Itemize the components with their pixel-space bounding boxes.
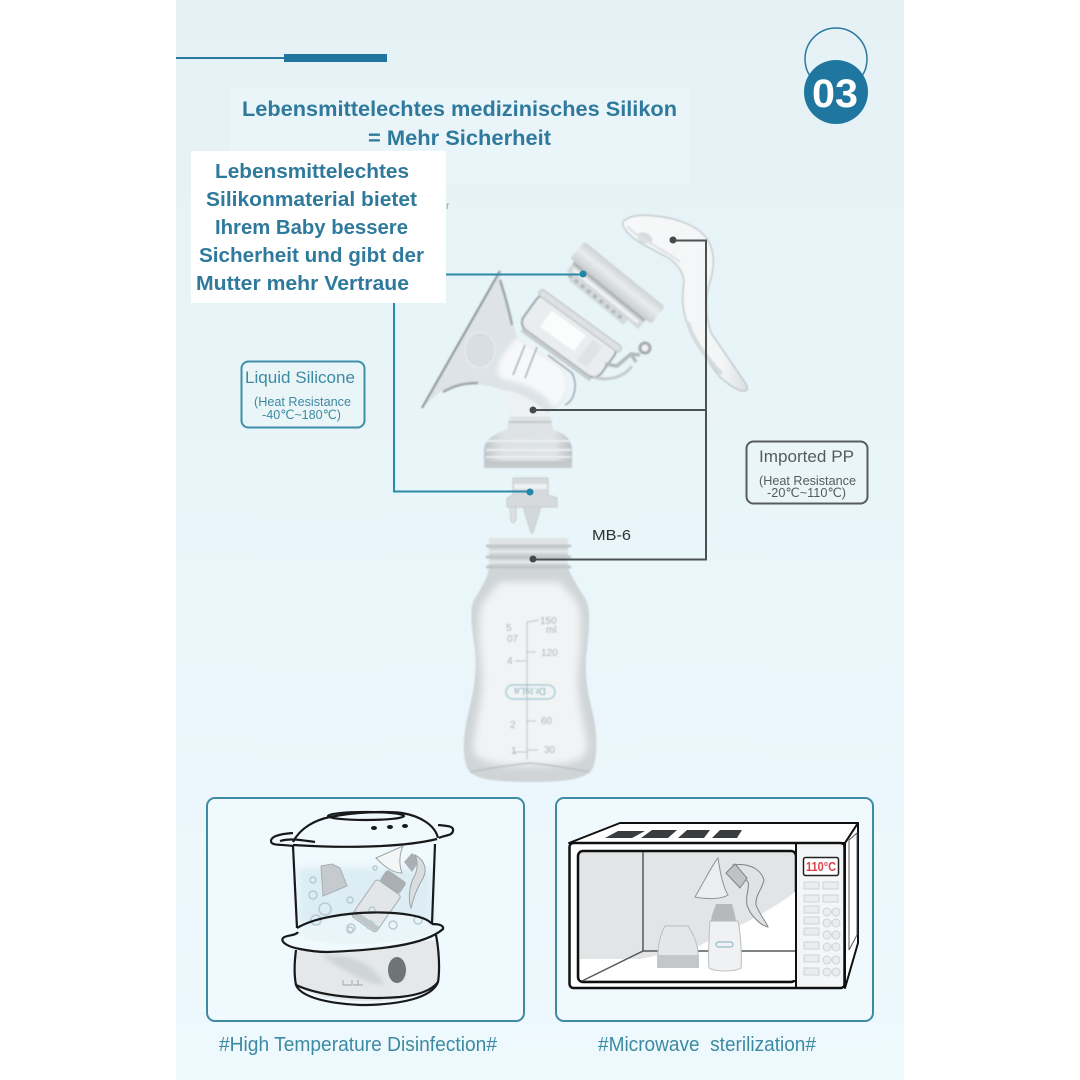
background panel [176, 0, 904, 1080]
section number badge: 03 [812, 72, 858, 116]
bottle: 120 [541, 648, 558, 659]
panel: high temperature disinfection [207, 798, 524, 1021]
label: liquid silicone [242, 362, 364, 428]
title: Lebensmittelechtes medizinisches Silikon [242, 98, 677, 121]
header rule [176, 54, 387, 62]
callout: description text box: Sicherheit und gibt der [199, 245, 424, 267]
valve [507, 478, 557, 533]
teal leader dots [526, 270, 586, 496]
bottle: 60 [541, 716, 553, 727]
bottle: 2 [510, 720, 516, 731]
stray label fragment: r [446, 201, 450, 212]
callout: description text box [191, 151, 446, 303]
dark leader dots [530, 236, 676, 562]
teal leader lines [394, 274, 583, 492]
bottle: 5 [506, 623, 512, 634]
silicone diaphragm cap [559, 241, 665, 338]
bottle: 1 [511, 746, 517, 757]
label: imported pp: -20℃~110℃) [767, 485, 846, 500]
bottle: 150 [540, 616, 557, 627]
caption: microwave sterilization: #Microwave sterilization# [598, 1034, 817, 1056]
title backdrop [230, 88, 690, 185]
breast pump collar [484, 417, 572, 468]
breast pump funnel and body [422, 271, 575, 418]
label: imported pp [746, 442, 868, 504]
label: liquid silicone: Liquid Silicone [245, 368, 355, 387]
pump cup [513, 289, 650, 385]
dark leader lines [533, 240, 706, 560]
label: imported pp: (Heat Resistance [759, 473, 856, 488]
pump handle [623, 215, 747, 391]
icon: microwave [569, 823, 858, 988]
title: = Mehr Sicherheit [368, 127, 551, 150]
icon: microwave: 110°C [806, 859, 837, 874]
callout: description text box: Mutter mehr Vertraue [196, 273, 409, 295]
bottle: 4 [507, 656, 513, 667]
bottle: Dr.IsLa [514, 685, 546, 696]
panel: microwave sterilization [556, 798, 873, 1021]
label: imported pp: Imported PP [759, 447, 854, 466]
icon: steamer [271, 812, 453, 1005]
caption: high temperature disinfection: #High Temperature Disinfection# [219, 1034, 498, 1056]
bottle: 30 [544, 745, 556, 756]
bottle: 07 [507, 634, 519, 645]
bottle [464, 538, 596, 782]
label: liquid silicone: -40℃~180℃) [262, 407, 341, 422]
model label: MB-6 [592, 527, 631, 544]
title [242, 98, 677, 150]
label: liquid silicone: (Heat Resistance [254, 394, 351, 409]
callout: description text box: Ihrem Baby bessere [215, 217, 408, 239]
callout: description text box: Lebensmittelechtes [215, 161, 409, 183]
bottle: ml [546, 625, 557, 636]
callout: description text box: Silikonmaterial bietet [206, 189, 417, 211]
section number badge [804, 28, 868, 124]
